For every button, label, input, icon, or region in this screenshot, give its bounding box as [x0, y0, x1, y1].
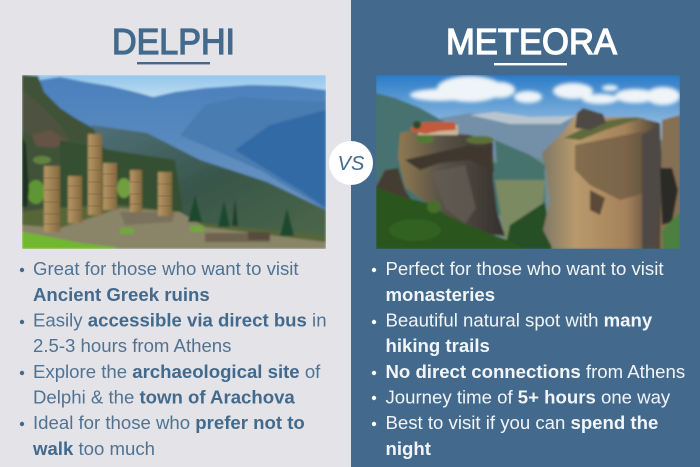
- heading underline: Meteora: [494, 63, 567, 65]
- badge: VS circle: VS: [338, 153, 365, 175]
- list: Delphi points: Great for those who want to visit: [33, 258, 299, 279]
- list: Delphi points: Ancient Greek ruins: [33, 284, 210, 305]
- list: Delphi points: Explore the archaeological site of: [33, 361, 321, 382]
- list: Meteora points: night: [386, 438, 431, 459]
- list: Meteora points: monasteries: [386, 284, 495, 305]
- list: Meteora points: Best to visit if you can spend the: [386, 412, 658, 433]
- badge: VS circle: [329, 141, 373, 185]
- list: Meteora points: Beautiful natural spot with many: [386, 310, 653, 330]
- photo: Meteora monastery and rocks: [376, 75, 680, 249]
- list: Meteora points: Perfect for those who want to visit: [386, 258, 664, 279]
- heading underline: Delphi: [137, 62, 210, 64]
- list: Delphi points: walk too much: [32, 438, 155, 459]
- photo: Delphi ruins and valley: [22, 75, 326, 249]
- heading: Delphi: DELPHI: [112, 21, 235, 62]
- list: Delphi points: [20, 258, 327, 459]
- list: Meteora points: [372, 258, 685, 459]
- list: Meteora points: Journey time of 5+ hours one way: [386, 386, 671, 408]
- list: Delphi points: 2.5-3 hours from Athens: [33, 335, 231, 356]
- list: Meteora points: No direct connections from Athens: [386, 361, 685, 382]
- panel: Meteora background: [351, 0, 700, 467]
- list: Meteora points: hiking trails: [386, 335, 490, 356]
- list: Delphi points: Delphi & the town of Arachova: [33, 386, 295, 408]
- heading: Meteora: METEORA: [446, 21, 617, 62]
- list: Delphi points: Ideal for those who prefer not to: [33, 412, 305, 433]
- panel: Delphi background: [0, 0, 351, 467]
- list: Delphi points: Easily accessible via direct bus in: [33, 310, 327, 330]
